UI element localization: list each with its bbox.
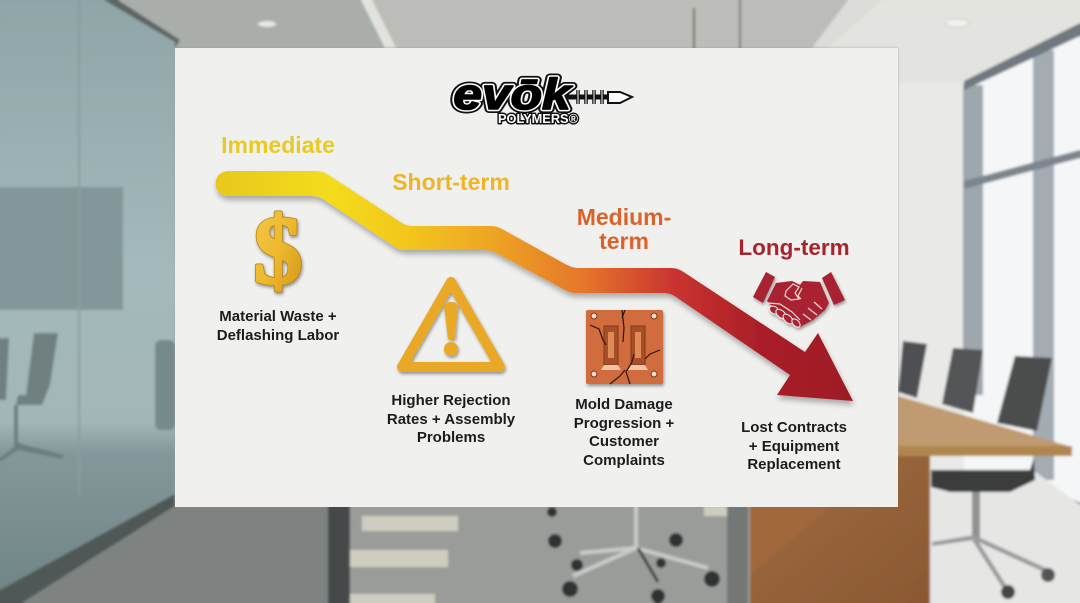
office chair base bbox=[573, 500, 708, 582]
text: medium-term costs: Customer bbox=[589, 433, 659, 450]
logo: Evok Polymers: evōk bbox=[453, 70, 573, 119]
logo drill bit bbox=[565, 90, 632, 104]
right wall and windows bbox=[898, 83, 968, 483]
logo: Evok Polymers: evōk bbox=[453, 70, 573, 119]
text: short-term costs: Rates + Assembly bbox=[387, 411, 516, 428]
table bbox=[898, 396, 1072, 456]
arrow: descending cost ribbon bbox=[216, 171, 853, 401]
icon: dollar sign: $ bbox=[254, 197, 302, 305]
text: immediate costs: Material Waste + bbox=[219, 308, 337, 325]
icon: broken handshake bbox=[753, 272, 845, 329]
logo: Evok Polymers: evōk bbox=[453, 70, 573, 119]
text: long-term costs: + Equipment bbox=[749, 438, 839, 455]
text: immediate costs: Deflashing Labor bbox=[217, 327, 339, 344]
logo: Evok Polymers bbox=[453, 70, 632, 126]
text: medium-term costs: Progression + bbox=[574, 415, 674, 432]
heading: Short-term: Short-term bbox=[392, 169, 510, 195]
text: short-term costs: Problems bbox=[417, 429, 485, 446]
text: medium-term costs: Mold Damage bbox=[575, 396, 673, 413]
text: short-term costs: Higher Rejection bbox=[391, 392, 511, 409]
icon: warning triangle bbox=[402, 282, 500, 367]
icon: cracked mold bbox=[586, 310, 663, 384]
heading: Medium-term: Medium- bbox=[577, 204, 671, 230]
chairs behind table bbox=[898, 341, 927, 398]
heading: Immediate: Immediate bbox=[221, 132, 335, 158]
icon: dollar sign: $ bbox=[254, 197, 302, 305]
heading: Long-term: Long-term bbox=[738, 235, 850, 260]
heading: Medium-term: term bbox=[599, 228, 649, 254]
logo: Evok Polymers: POLYMERS® bbox=[498, 111, 578, 126]
text: long-term costs: Replacement bbox=[747, 456, 841, 473]
text: long-term costs: Lost Contracts bbox=[741, 419, 847, 436]
panel: timeline board bbox=[175, 48, 898, 507]
text: medium-term costs: Complaints bbox=[583, 452, 665, 469]
